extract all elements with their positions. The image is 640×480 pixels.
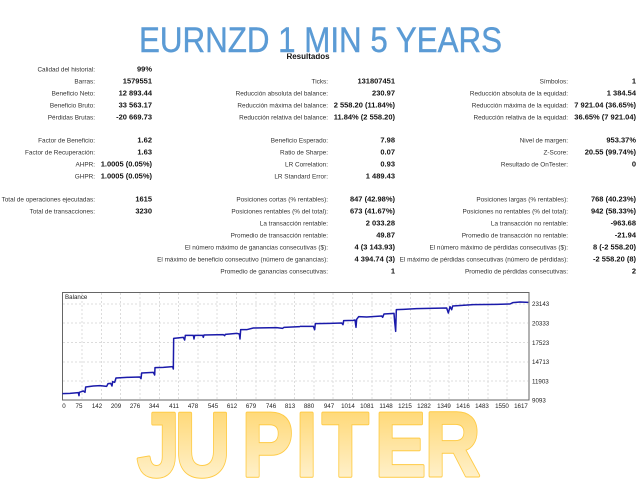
stats column 1: AHPR: (75, 162, 95, 168)
stats column 3: Promedio de pérdidas consecutivas: (465, 268, 568, 276)
stats column 2: 847 (42.98%) (350, 194, 396, 204)
stats column 1: Pérdidas Brutas: (48, 114, 95, 122)
stats column 2: Reducción relativa del balance: (239, 114, 328, 122)
stats column 3: 942 (58.33%) (591, 206, 637, 216)
x axis labels: 0 (62, 403, 66, 410)
stats column 3: Posiciones no rentables (% del total): (462, 208, 568, 216)
x axis labels: 344 (149, 403, 160, 410)
y axis labels: 17523 (532, 340, 550, 347)
stats column 2: 2 033.28 (366, 218, 395, 228)
stats column 3: -963.68 (611, 218, 636, 228)
balance chart (62, 292, 550, 410)
x axis labels: 478 (188, 403, 199, 410)
stats column 2: 4 (3 143.93) (355, 242, 395, 252)
stats column 3: 953.37% (606, 136, 636, 144)
stats column 2: Reducción máxima del balance: (237, 102, 328, 110)
stats column 2: La transacción rentable: (260, 220, 328, 228)
stats column 2: 1 489.43 (366, 172, 395, 180)
stats column 3: Reducción absoluta de la equidad: (470, 90, 568, 98)
stats column 2: 49.87 (376, 230, 395, 240)
stats column 2: 0.07 (380, 148, 395, 156)
y axis labels (532, 301, 550, 404)
stats column 2: 2 558.20 (11.84%) (334, 100, 396, 110)
x axis labels: 1617 (514, 403, 528, 410)
stats column 2 (157, 76, 396, 276)
y axis labels: 14713 (532, 359, 550, 366)
x axis labels: 545 (208, 403, 219, 410)
stats column 1: Factor de Beneficio: (38, 138, 95, 144)
stats column 1: -20 669.73 (116, 112, 152, 122)
stats column 3: 8 (-2 558.20) (593, 242, 636, 252)
stats column 2: 4 394.74 (3) (355, 254, 395, 264)
stats column 2: Posiciones cortas (% rentables): (236, 196, 328, 204)
title: EURNZD 1 MIN 5 YEARS (139, 21, 502, 60)
stats column 1: Calidad del historial: (37, 66, 95, 74)
stats column 3: El máximo de pérdidas consecutivas (número de pérdidas): (400, 256, 568, 264)
stats column 3: 36.65% (7 921.04) (574, 112, 636, 122)
stats column 2: 131807451 (357, 76, 395, 86)
stats column 1: 1.62 (137, 136, 152, 144)
stats column 1: 99% (137, 64, 152, 74)
stats column 1 (2, 64, 153, 216)
x axis labels: 1550 (495, 403, 509, 410)
stats column 3: Promedio de transacción no rentable: (462, 232, 568, 240)
stats column 3: Símbolos: (540, 78, 568, 86)
stats column 2: 7.98 (380, 136, 395, 144)
stats column 3: -2 558.20 (8) (593, 254, 636, 264)
stats column 1: GHPR: (75, 174, 95, 180)
stats column 2: Posiciones rentables (% del total): (231, 208, 328, 216)
stats column 3: Reducción máxima de la equidad: (472, 102, 568, 110)
stats column 1: 3230 (135, 206, 152, 216)
x axis labels: 1215 (398, 403, 412, 410)
stats column 1: 12 893.44 (119, 88, 153, 98)
stats column 3: 1 (632, 76, 636, 86)
x axis labels: 947 (324, 403, 335, 410)
x axis labels: 209 (111, 403, 122, 410)
stats column 2: Promedio de ganancias consecutivas: (220, 268, 328, 276)
stats column 1: 1579551 (123, 76, 152, 86)
x axis labels: 1416 (456, 403, 470, 410)
x axis labels: 1081 (360, 403, 374, 410)
stats column 3: 20.55 (99.74%) (585, 148, 636, 156)
stats column 1: Total de operaciones ejecutadas: (2, 196, 95, 204)
stats column 1: 1.63 (137, 148, 152, 156)
stats column 3: 1 384.54 (607, 88, 637, 98)
stats column 3: 0 (632, 160, 636, 168)
stats column 2: 1 (391, 266, 395, 276)
stats column 1: Factor de Recuperación: (25, 150, 95, 156)
x axis labels: 1282 (417, 403, 431, 410)
x axis labels: 75 (76, 403, 83, 410)
stats column 3: 7 921.04 (36.65%) (574, 100, 636, 110)
chart label: Balance: Balance (65, 294, 88, 301)
x axis labels: 1349 (437, 403, 451, 410)
stats column 1: Beneficio Neto: (52, 90, 95, 98)
stats column 2: El máximo de beneficio consecutivo (número de ganancias): (157, 256, 328, 264)
y axis labels: 23143 (532, 301, 550, 308)
x axis labels: 880 (304, 403, 315, 410)
x axis labels (62, 403, 528, 410)
stats column 2: 0.93 (380, 160, 395, 168)
stats column 2: Ticks: (312, 78, 328, 86)
y axis labels: 11903 (532, 378, 549, 386)
stats column 3: La transacción no rentable: (491, 220, 568, 228)
x axis labels: 142 (92, 403, 103, 410)
stats column 1: 1.0005 (0.05%) (101, 172, 152, 180)
stats column 2: El número máximo de ganancias consecutivas ($): (185, 244, 328, 252)
stats column 2: Reducción absoluta del balance: (236, 90, 328, 98)
stats column 3: Z-Score: (543, 150, 568, 156)
x axis labels: 276 (130, 403, 141, 410)
heading: Resultados: Resultados (286, 52, 330, 61)
stats column 1: 1.0005 (0.05%) (101, 160, 152, 168)
stats column 2: LR Correlation: (285, 162, 328, 168)
x axis labels: 411 (169, 403, 179, 410)
stats column 3: Resultado de OnTester: (501, 162, 568, 168)
x axis labels: 813 (285, 403, 296, 410)
stats column 1: 1615 (135, 194, 152, 204)
stats column 3: Reducción relativa de la equidad: (473, 114, 568, 122)
stats column 2: 673 (41.67%) (350, 206, 396, 216)
stats column 2: Promedio de transacción rentable: (231, 232, 328, 240)
stats column 3: Nivel de margen: (520, 138, 568, 144)
balance line (62, 302, 528, 396)
stats column 3: 2 (632, 266, 636, 276)
stats column 1: Total de transacciones: (30, 208, 95, 216)
stats column 3: -21.94 (615, 230, 637, 240)
y axis labels: 9093 (532, 398, 546, 404)
stats column 1: Barras: (74, 78, 95, 86)
stats column 3: 768 (40.23%) (591, 194, 637, 204)
stats column 2: 11.84% (2 558.20) (334, 112, 396, 122)
stats column 2: Ratio de Sharpe: (280, 150, 328, 156)
x axis labels: 679 (246, 403, 257, 410)
stats column 2: Beneficio Esperado: (271, 138, 328, 144)
y axis labels: 20333 (532, 320, 550, 328)
x axis labels: 1148 (379, 403, 393, 410)
stats column 2: LR Standard Error: (274, 174, 328, 180)
x axis labels: 1014 (341, 403, 355, 410)
stats column 3 (400, 76, 637, 276)
stats column 1: 33 563.17 (119, 100, 152, 110)
x axis labels: 1483 (475, 403, 489, 410)
x axis labels: 746 (266, 403, 277, 410)
x axis labels: 612 (227, 403, 238, 410)
stats column 1: Beneficio Bruto: (50, 102, 95, 110)
stats column 2: 230.97 (372, 88, 395, 98)
stats column 3: El número máximo de pérdidas consecutivas ($): (429, 244, 568, 252)
stats column 3: Posiciones largas (% rentables): (476, 196, 568, 204)
